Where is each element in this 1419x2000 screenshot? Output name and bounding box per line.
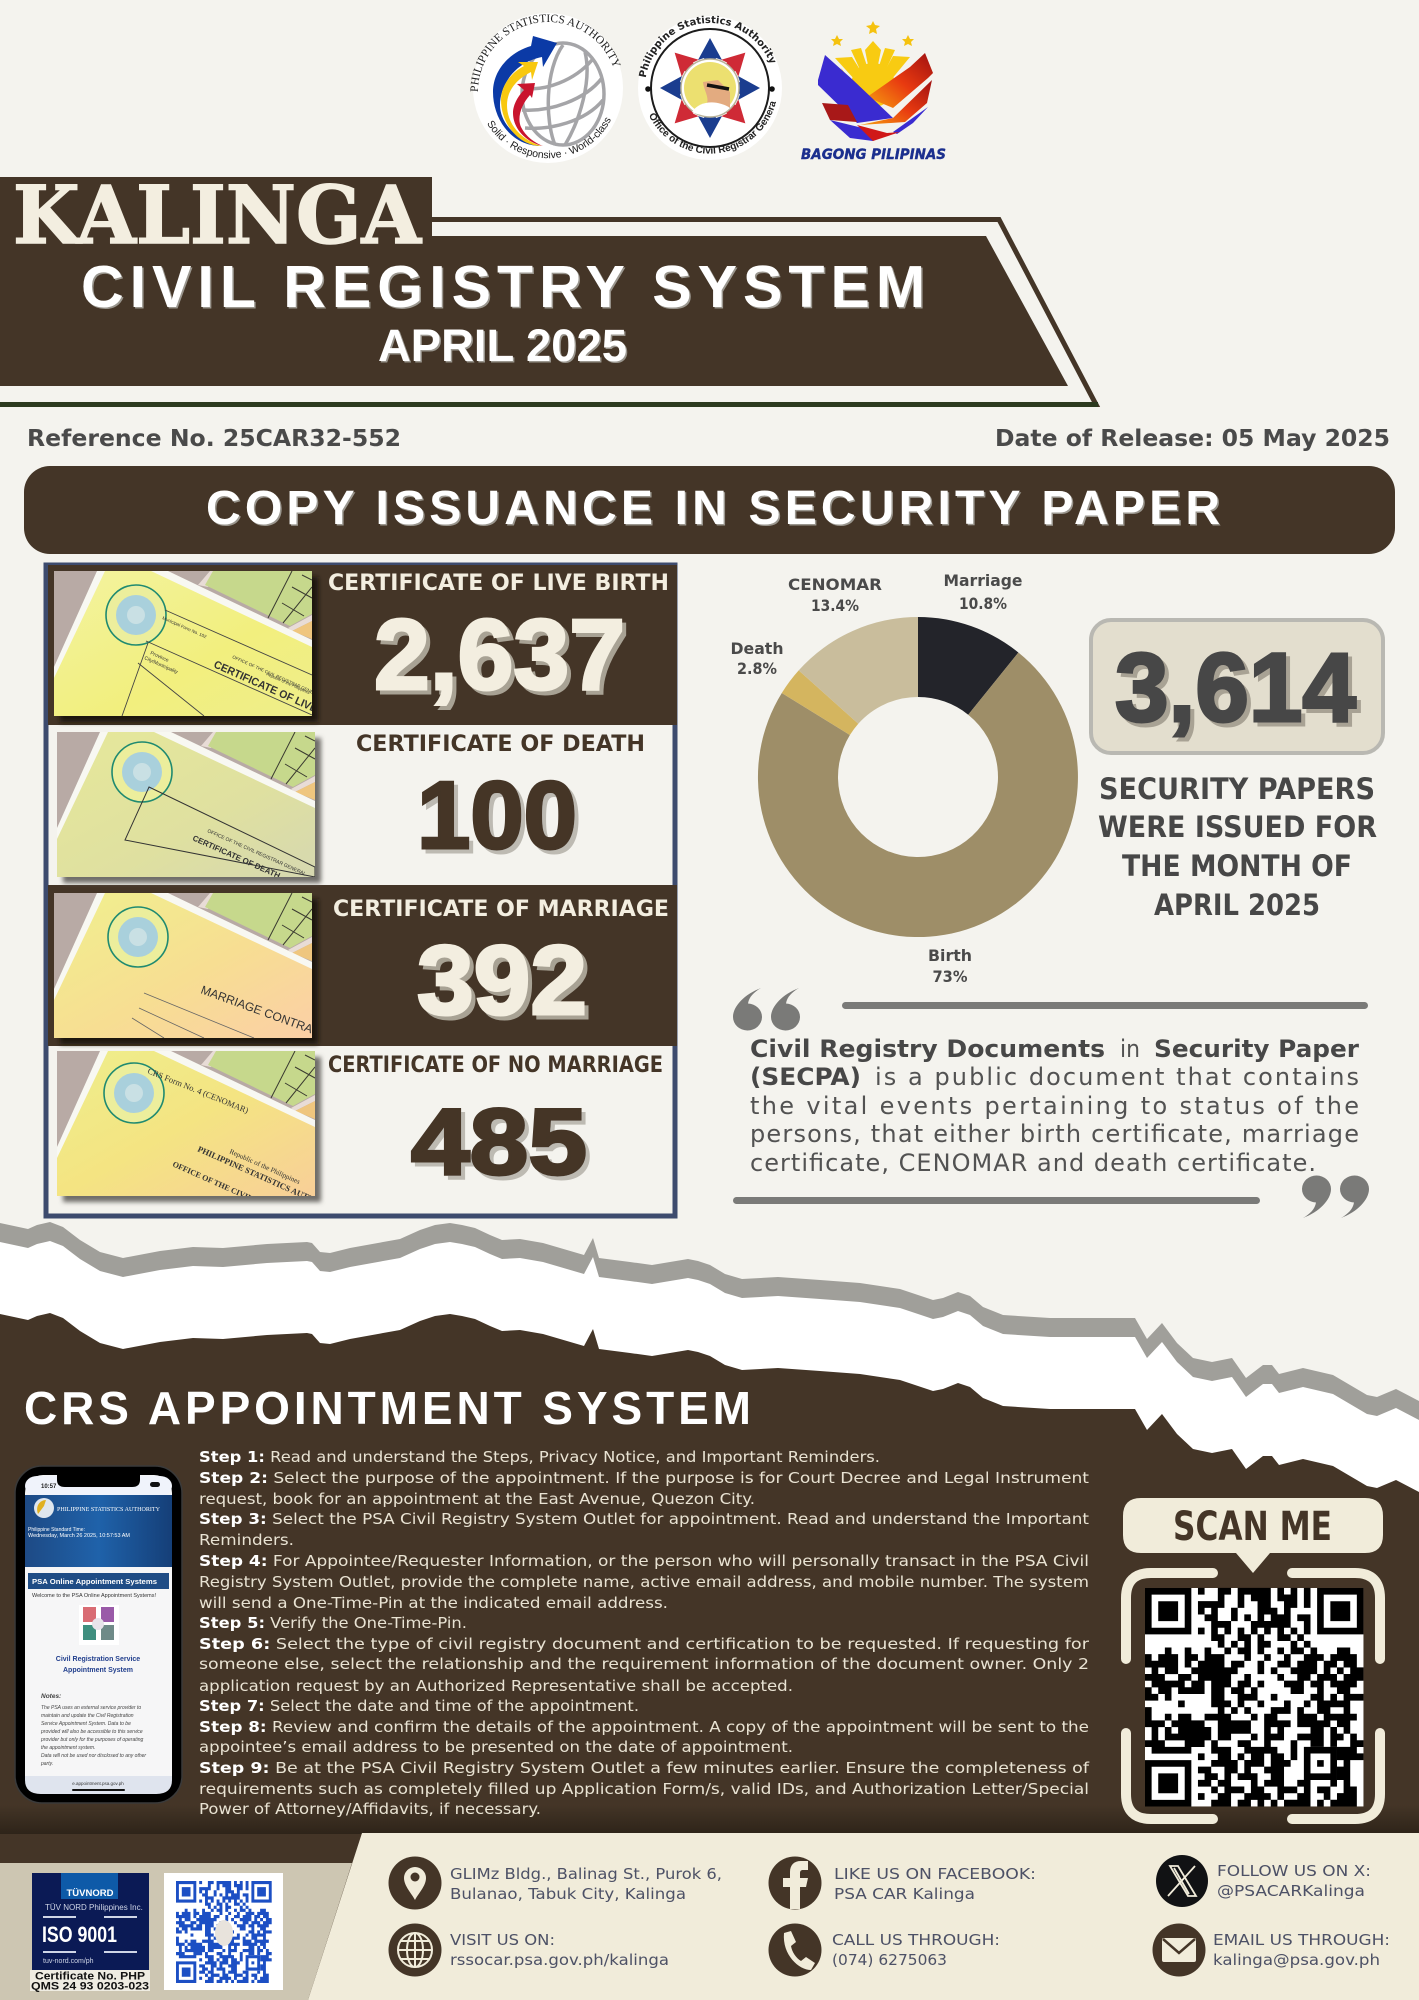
total callout (1091, 620, 1383, 753)
quote paragraph: the vital events pertaining to status of the (750, 1092, 1359, 1120)
phone notes: provided will also be accessible to this service (40, 1729, 143, 1735)
quote paragraph: is a public document that contains (875, 1063, 1359, 1091)
phone app title bar (28, 1573, 169, 1589)
label: marriage: Marriage (944, 571, 1023, 590)
contact: phone: (074) 6275063 (832, 1951, 947, 1969)
row: certificate of live birth: OFFICE OF THE CIVIL REGISTRAR GENERAL (232, 654, 322, 698)
contact: x (1156, 1855, 1371, 1907)
appointment steps: Power of Attorney/Affidavits, if necessary. (199, 1800, 541, 1818)
label: death: 2.8% (737, 659, 777, 678)
contact: email: kalinga@psa.gov.ph (1213, 1951, 1380, 1969)
row: certificate of no marriage (57, 1051, 324, 1206)
appointment steps (199, 1448, 1090, 1818)
total description: WERE ISSUED FOR (1098, 810, 1377, 844)
contact: x: FOLLOW US ON X: (1217, 1862, 1371, 1880)
phone site header: Wednesday, March 26 2025, 10:57:53 AM (28, 1533, 130, 1539)
label: no marriage: CERTIFICATE OF NO MARRIAGE (328, 1053, 663, 1078)
quote paragraph (750, 1035, 1359, 1177)
label: marriage: CERTIFICATE OF MARRIAGE (333, 897, 669, 922)
phone notes: party. (40, 1761, 53, 1767)
badge: ISO 9001 (30, 1873, 150, 1992)
phone app title bar: PSA Online Appointment Systems (32, 1577, 157, 1586)
logo: Philippine Statistics Authority: Solid · Responsive · World-class (488, 118, 611, 158)
release date: Date of Release: 05 May 2025 (995, 426, 1390, 452)
phone mockup: 10:57 (41, 1484, 57, 1490)
footer shadow band (0, 1805, 1419, 1834)
label: death: CERTIFICATE OF DEATH (356, 732, 645, 757)
title: Civil Registry System: CIVIL REGISTRY SYSTEM (81, 254, 925, 320)
appointment steps: Step 3: Select the PSA Civil Registry System Outlet for appointment. Read and understand the Important (199, 1510, 1089, 1528)
row: certificate of no marriage: OFFICE OF THE CIVIL REGISTRAR (171, 1160, 299, 1223)
slice: birth (758, 652, 1078, 937)
row: certificate of no marriage: CRS Form No. 4 (CENOMAR) (146, 1066, 250, 1115)
icon: closing quote (1302, 1176, 1369, 1218)
contact: phone (768, 1924, 1000, 1976)
label: cenomar (788, 575, 882, 615)
label: cenomar: 13.4% (811, 596, 859, 615)
row: certificate of live birth: City/Municipality (143, 655, 179, 676)
row: certificate of marriage (54, 893, 330, 1044)
qr frame brackets (1126, 1573, 1380, 1819)
reference number: Reference No. 25CAR32-552 (27, 426, 401, 452)
appointment steps: Step 1: Read and understand the Steps, Privacy Notice, and Important Reminders. (199, 1448, 880, 1466)
contact: x: @PSACARKalinga (1217, 1882, 1365, 1900)
Kalinga tab: KALINGA (13, 168, 422, 262)
contact: website: rssocar.psa.gov.ph/kalinga (450, 1951, 669, 1969)
badge: ISO 9001: QMS 24 93 0203-023 (31, 1980, 149, 1992)
phone app icon (79, 1605, 119, 1645)
phone notes: the appointment system. (41, 1745, 95, 1751)
phone notes: provider but only for the purposes of operating (40, 1737, 144, 1743)
quote paragraph: in (1120, 1035, 1140, 1063)
total description: THE MONTH OF (1122, 849, 1352, 883)
total description: APRIL 2025 (1154, 888, 1320, 922)
contact: email (1152, 1924, 1390, 1976)
appointment steps: Reminders. (199, 1531, 294, 1549)
logo: Office of the Civil Registrar General (638, 16, 782, 160)
appointment steps: appointee’s email address to be presented on the date of appointment. (199, 1738, 793, 1756)
phone notes: Service Appointment System. Data to be (41, 1721, 131, 1727)
contact: facebook: LIKE US ON FACEBOOK: (834, 1865, 1036, 1883)
section heading: CRS appointment system: CRS APPOINTMENT SYSTEM (24, 1382, 751, 1434)
row: certificate of no marriage: Republic of the Philippines (228, 1148, 301, 1186)
qr code: appointment system (1145, 1588, 1363, 1806)
scan me callout: SCAN ME (1173, 1504, 1332, 1550)
row: certificate of death (57, 732, 321, 883)
logo: Bagong Pilipinas: BAGONG PILIPINAS (801, 147, 946, 163)
appointment steps: Step 8: Review and confirm the details of the appointment. A copy of the appointment will be sent to the (199, 1718, 1089, 1736)
appointment steps: Step 2: Select the purpose of the appointment. If the purpose is for Court Decree and Legal Instrument (199, 1469, 1089, 1487)
label: birth: 73% (932, 967, 968, 986)
label: marriage (944, 571, 1023, 613)
phone mockup: Civil Registration Service (56, 1656, 140, 1663)
slice: marriage (918, 617, 1018, 715)
appointment steps: Step 6: Select the type of civil registry document and certification to be requested. If requesting for (199, 1635, 1090, 1653)
footer left block (0, 1863, 352, 2000)
icon: opening quote (733, 988, 800, 1030)
quote rule bottom (733, 1197, 1260, 1204)
row: certificate of live birth: Province (149, 650, 170, 664)
contact: address: GLIMz Bldg., Balinag St., Purok 6, (450, 1865, 722, 1883)
quote paragraph: persons, that either birth certificate, marriage (750, 1120, 1359, 1148)
phone notes: The PSA uses an external service provider to (41, 1705, 141, 1711)
appointment steps: requirements such as completely filled up Application Form/s, valid IDs, and Authorization Letter/Special (199, 1780, 1089, 1798)
row: certificate of live birth: CERTIFICATE OF LIVE (212, 659, 319, 715)
phone notes: Data will not be used nor disclosed to any other (41, 1753, 146, 1759)
total description: SECURITY PAPERS (1099, 772, 1375, 806)
appointment steps: someone else, select the relationship and the requirement information of the document owner. Only 2 (199, 1655, 1089, 1673)
contact: facebook: PSA CAR Kalinga (834, 1885, 975, 1903)
appointment steps: Step 5: Verify the One-Time-Pin. (199, 1614, 467, 1632)
value: 392: 392 (417, 925, 587, 1035)
label: death: Death (730, 639, 784, 658)
contact: website (388, 1924, 669, 1976)
donut chart (730, 571, 1078, 986)
header banner green rule (0, 402, 1098, 407)
total callout: 3,614 (1115, 633, 1356, 742)
appointment steps: application request by an Authorized Representative shall be accepted. (199, 1677, 793, 1695)
header banner body (0, 236, 1068, 386)
phone notes: Notes: (41, 1693, 61, 1700)
phone notes (40, 1693, 146, 1767)
appointment steps: Registry System Outlet, provide the complete name, active email address, and mobile number. The system (199, 1573, 1089, 1591)
phone site header: PHILIPPINE STATISTICS AUTHORITY (57, 1506, 160, 1513)
contact: facebook (768, 1856, 1036, 1910)
phone site header (25, 1495, 172, 1567)
row: certificate of death: OFFICE OF THE CIVIL REGISTRAR GENERAL (206, 828, 307, 878)
row: certificate of live birth (54, 571, 322, 722)
logo: Office of the Civil Registrar General: Philippine Statistics Authority (638, 16, 776, 78)
phone site header: Philippine Standard Time: (28, 1527, 85, 1533)
quote rule top (842, 1002, 1368, 1009)
badge: ISO 9001: tuv-nord.com/ph (43, 1958, 94, 1965)
label: birth (928, 946, 972, 986)
row: certificate of no marriage: PHILIPPINE STATISTICS AUTHORITY (196, 1144, 342, 1216)
qr code: feedback (164, 1873, 283, 1990)
phone mockup: Appointment System (63, 1667, 133, 1674)
slice: death (782, 670, 858, 735)
contact: address: Bulanao, Tabuk City, Kalinga (450, 1885, 686, 1903)
quote paragraph: certificate, CENOMAR and death certificate. (750, 1149, 1316, 1177)
label: cenomar: CENOMAR (788, 575, 882, 594)
section banner: copy issuance: COPY ISSUANCE IN SECURITY PAPER (206, 482, 1220, 535)
total description (1098, 772, 1377, 922)
quote paragraph: Civil Registry Documents (750, 1035, 1105, 1063)
scan me callout (1123, 1498, 1383, 1573)
phone mockup: e.appointment.psa.gov.ph (72, 1781, 124, 1786)
appointment steps: request, book for an appointment at the East Avenue, Quezon City. (199, 1490, 755, 1508)
value: 485: 485 (411, 1089, 587, 1194)
footer panel (308, 1833, 1419, 2000)
logo: Philippine Statistics Authority: PHILIPPINE STATISTICS AUTHORITY (470, 14, 621, 92)
header banner outline (0, 220, 1096, 404)
label: marriage: 10.8% (959, 594, 1007, 613)
badge: ISO 9001: TÜVNORD (67, 1888, 114, 1899)
appointment steps: Step 7: Select the date and time of the appointment. (199, 1697, 639, 1715)
logo: Bagong Pilipinas (801, 21, 946, 163)
logo: Philippine Statistics Authority (470, 13, 623, 163)
value: 2,637: 2,637 (374, 599, 625, 711)
panel: certificate table (46, 565, 677, 1223)
badge: ISO 9001: Certificate No. PHP (35, 1970, 145, 1982)
appointment steps: will send a One-Time-Pin at the indicated email address. (199, 1594, 668, 1612)
row: certificate of live birth: Republic of the Philippines (266, 671, 311, 695)
contact: website: VISIT US ON: (450, 1931, 555, 1949)
contact: phone: CALL US THROUGH: (832, 1931, 1000, 1949)
quote paragraph: (SECPA) (750, 1063, 861, 1091)
quote paragraph: Security Paper (1154, 1035, 1359, 1063)
row: certificate of marriage: MARRIAGE CONTRACT (199, 983, 330, 1042)
badge: ISO 9001: ISO 9001 (42, 1922, 117, 1947)
subtitle: April 2025: APRIL 2025 (378, 320, 627, 371)
label: death (730, 639, 784, 678)
contact: address (388, 1856, 722, 1910)
appointment steps: Step 9: Be at the PSA Civil Registry System Outlet a few minutes earlier. Ensure the completeness of (199, 1759, 1090, 1777)
slice: cenomar (799, 617, 918, 724)
contact: email: EMAIL US THROUGH: (1213, 1931, 1390, 1949)
row: certificate of live birth: Municipal Form No. 102 (162, 615, 208, 640)
row: certificate of death: CERTIFICATE OF DEATH (191, 834, 282, 880)
phone notes: maintain and update the Civil Registration (41, 1713, 134, 1719)
section banner: copy issuance (24, 466, 1395, 554)
torn paper edge (0, 1222, 1419, 2000)
appointment steps: Step 4: For Appointee/Requester Information, or the person who will personally transact in the PSA Civil (199, 1552, 1089, 1570)
label: live birth: CERTIFICATE OF LIVE BIRTH (328, 571, 669, 596)
label: birth: Birth (928, 946, 972, 965)
value: 100: 100 (417, 762, 577, 869)
badge: ISO 9001: TÜV NORD Philippines Inc. (45, 1903, 143, 1912)
phone mockup (15, 1466, 182, 1803)
phone mockup: Welcome to the PSA Online Appointment Systems! (32, 1593, 156, 1599)
